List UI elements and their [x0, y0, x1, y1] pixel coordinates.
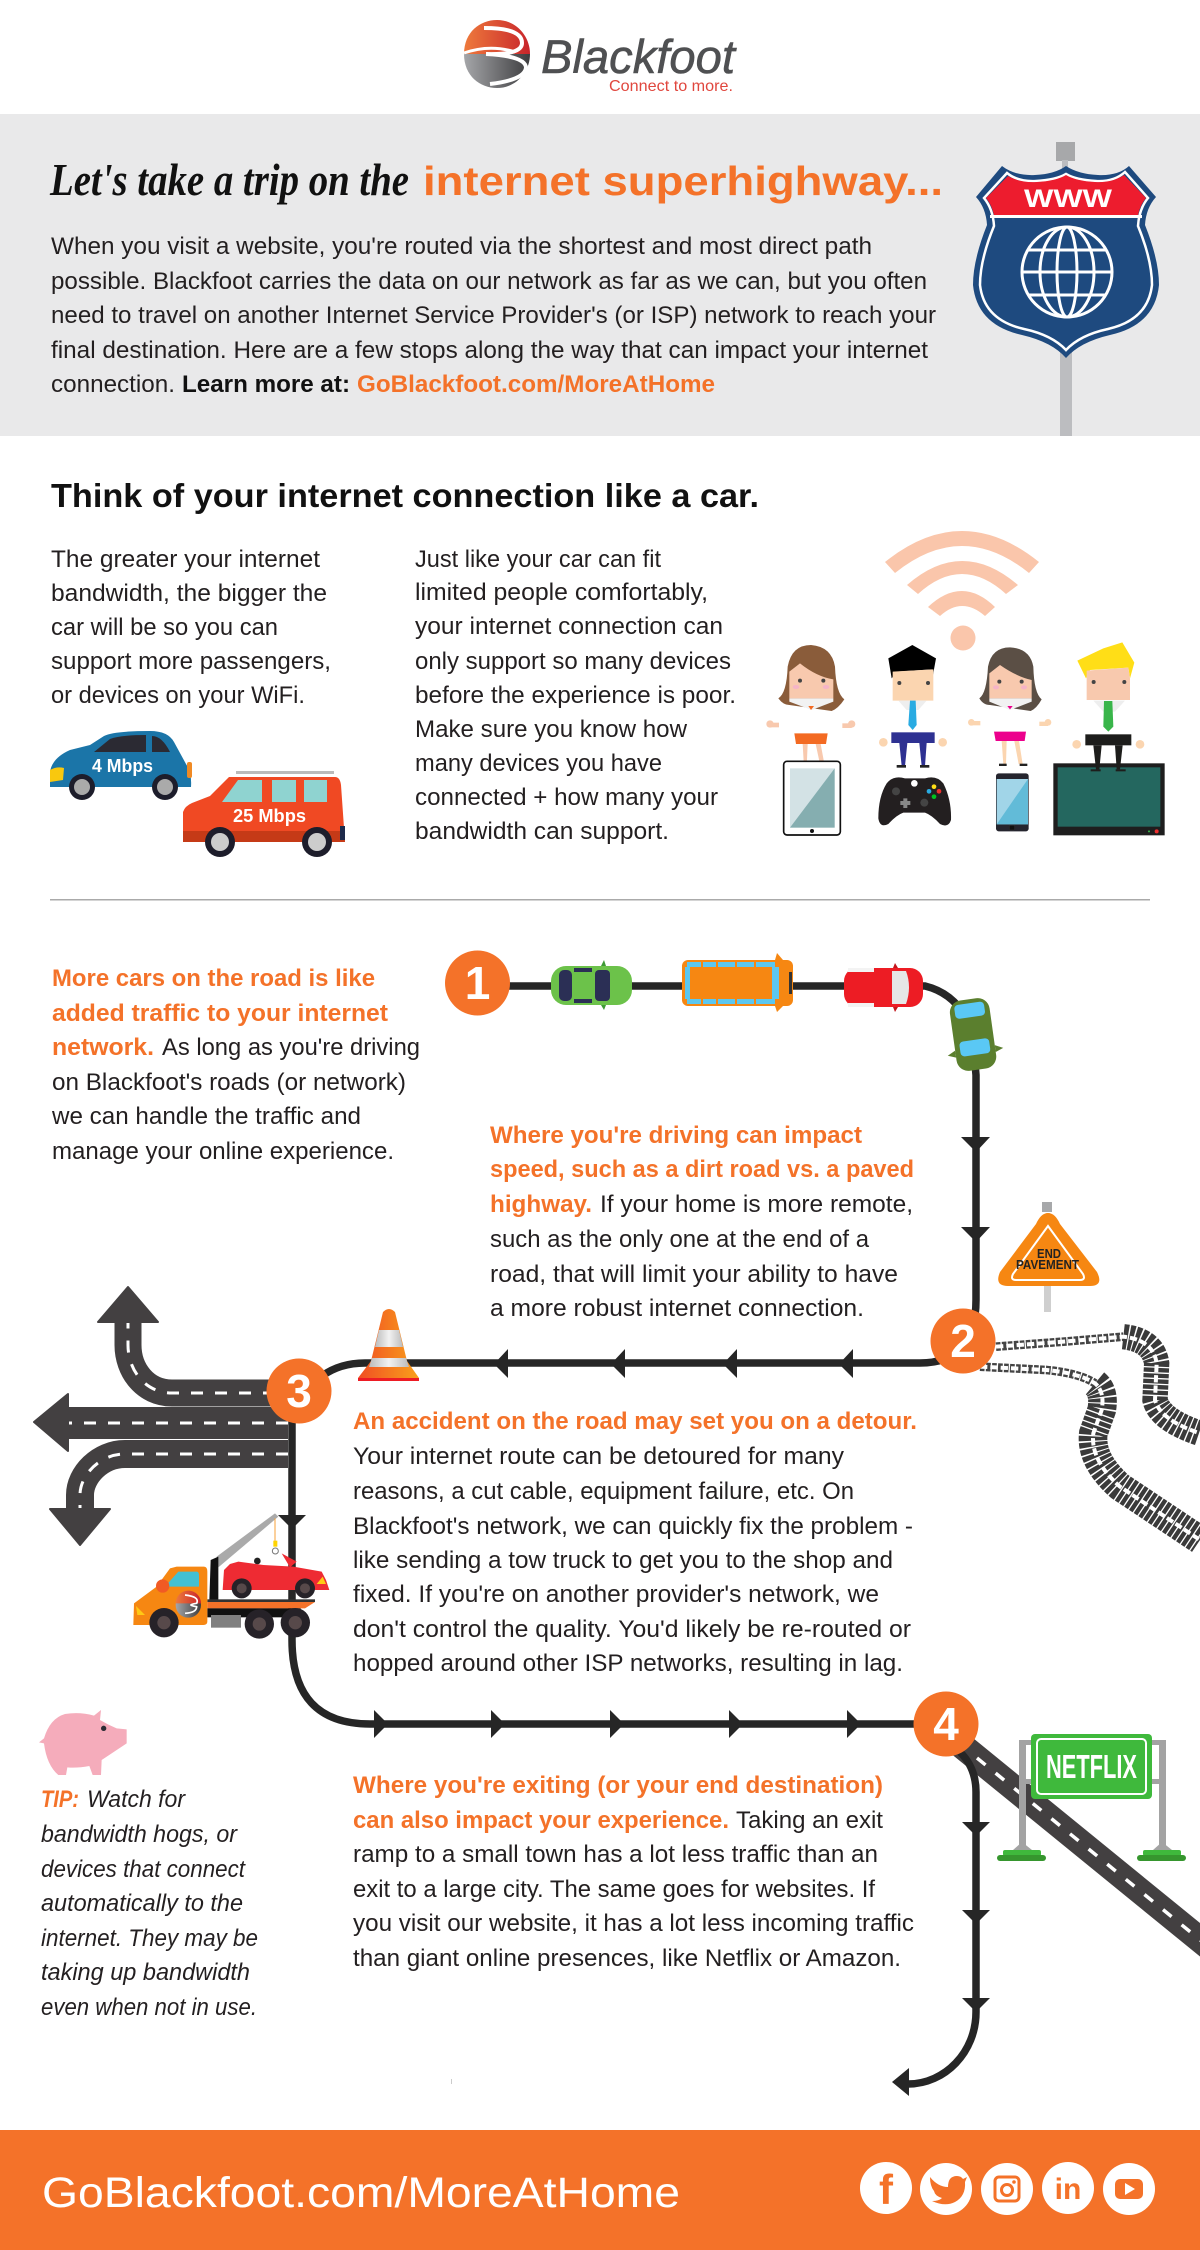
text block: devices: before the experience is poor.: [415, 682, 736, 709]
text block: bandwidth: car will be so you can: [51, 614, 278, 641]
text block: step 1 traffic: network.: [52, 1034, 154, 1061]
heading: car analogy: Think of your internet connection like a car.: [51, 477, 759, 514]
icon: facebook: [860, 2162, 912, 2214]
text block: devices: [415, 546, 736, 845]
arrows: route direction: [278, 1137, 990, 2096]
text block: step 2 speed: speed, such as a dirt road vs. a paved: [490, 1156, 914, 1183]
text block: tip: automatically to the: [41, 1890, 243, 1917]
text block: step 3 accident: An accident on the road may set you on a detour.: [353, 1408, 917, 1435]
icon: globe: [1022, 227, 1112, 317]
icon: twitter: [920, 2163, 972, 2215]
text block: intro: [51, 233, 936, 398]
text block: tip: devices that connect: [41, 1856, 246, 1883]
text block: step 2 speed: [490, 1122, 914, 1322]
icon: red van 25 Mbps: [183, 771, 345, 857]
text block: step 4 exiting: Taking an exit: [736, 1807, 883, 1834]
icon: instagram: [981, 2163, 1033, 2215]
text block: step 1 traffic: added traffic to your internet: [52, 1000, 388, 1027]
icon: piggy: [39, 1710, 127, 1775]
text block: step 3 accident: fixed. If you're on another provider's network, we: [353, 1581, 879, 1608]
person: woman with phone: [968, 647, 1051, 766]
text block: intro: When you visit a website, you're routed via the shortest and most direct path: [51, 233, 872, 260]
text block: step 1 traffic: we can handle the traffic and: [51, 1103, 361, 1130]
icon: television: [1053, 745, 1165, 835]
heading: intro title: internet superhighway...: [423, 158, 943, 204]
text block: bandwidth: [51, 546, 331, 709]
text block: step 4 exiting: you visit our website, it has a lot less incoming traffic: [353, 1910, 914, 1937]
icon: red van 25 Mbps: 25 Mbps: [233, 806, 306, 826]
text block: devices: Just like your car can fit: [415, 546, 661, 573]
text block: intro: final destination. Here are a few stops along the way that can impact your internet: [51, 337, 928, 364]
road: lower branch: [50, 1454, 288, 1545]
logo: Blackfoot: [464, 20, 737, 95]
text block: intro: possible. Blackfoot carries the data on our network as far as we can, but you often: [51, 268, 927, 295]
footer url: GoBlackfoot.com/MoreAtHome: [42, 2169, 680, 2217]
text block: step 4 exiting: can also impact your experience.: [353, 1807, 729, 1834]
icon: towed red car: [223, 1553, 329, 1598]
text block: step 3 accident: Blackfoot's network, we can quickly fix the problem -: [353, 1513, 913, 1540]
text block: step 2 speed: road, that will limit your ability to have: [490, 1261, 898, 1288]
icon: wifi signal: [885, 531, 1039, 650]
text block: step 1 traffic: on Blackfoot's roads (or network): [52, 1069, 406, 1096]
marker: step 3: 3: [286, 1365, 312, 1417]
text block: step 1 traffic: [51, 965, 420, 1165]
text block: devices: only support so many devices: [415, 648, 731, 675]
text block: step 3 accident: [353, 1408, 917, 1677]
text block: devices: connected + how many your: [415, 784, 718, 811]
text block: step 2 speed: a more robust internet connection.: [490, 1295, 864, 1322]
text block: intro: Learn more at:: [182, 371, 350, 398]
marker: step 4: [914, 1692, 978, 1756]
road: upper branch: [98, 1287, 275, 1393]
icon: end pavement sign: [998, 1202, 1099, 1312]
marker: step 4: 4: [933, 1698, 959, 1750]
icon: linkedin: [1042, 2162, 1094, 2214]
icon: red car: [844, 963, 923, 1012]
text block: devices: bandwidth can support.: [415, 818, 669, 845]
text block: step 3 accident: don't control the quality. You'd likely be re-routed or: [353, 1616, 911, 1643]
text block: devices: your internet connection can: [415, 613, 723, 640]
panel: intro band: [0, 114, 1200, 436]
icon: tire tracks: [980, 1337, 1200, 1540]
text block: tip: even when not in use.: [41, 1994, 257, 2021]
icon: olive car: [940, 995, 1006, 1074]
marker: step 2: 2: [950, 1315, 976, 1367]
text block: step 4 exiting: than giant online presences, like Netflix or Amazon.: [353, 1945, 901, 1972]
text block: step 1 traffic: As long as you're driving: [162, 1034, 420, 1061]
marker: step 2: [930, 1308, 996, 1374]
icon: traffic cone: [358, 1309, 419, 1381]
icon: orange bus: [682, 953, 793, 1012]
text block: step 2 speed: highway.: [490, 1191, 592, 1218]
text block: step 2 speed: such as the only one at the end of a: [490, 1226, 870, 1253]
icon: WWW highway shield sign: [973, 142, 1159, 436]
text block: step 1 traffic: More cars on the road is like: [52, 965, 375, 992]
text block: intro: connection.: [51, 371, 175, 398]
text block: step 4 exiting: [353, 1772, 914, 1972]
icon: game controller: [878, 777, 951, 825]
person: woman with tablet: [766, 645, 855, 770]
text block: tip: TIP:: [41, 1786, 79, 1813]
text block: tip: internet. They may be: [41, 1925, 258, 1952]
text block: tip: bandwidth hogs, or: [41, 1821, 238, 1848]
heading: intro title: Let's take a trip on the: [49, 154, 409, 205]
icon: Blackfoot sphere: [464, 20, 530, 88]
text block: intro: GoBlackfoot.com/MoreAtHome: [357, 371, 715, 398]
icon: WWW highway shield sign: WWW: [1024, 185, 1112, 213]
icon: tablet: [784, 761, 840, 835]
text block: tip: Watch for: [87, 1786, 186, 1813]
logo tagline: Connect to more.: [609, 78, 733, 95]
marker: step 1: [445, 950, 510, 1016]
text block: step 3 accident: like sending a tow truck to get you to the shop and: [353, 1547, 893, 1574]
icon: Netflix highway sign: NETFLIX: [1046, 1748, 1137, 1785]
text block: step 4 exiting: ramp to a small town has a lot less traffic than an: [353, 1841, 878, 1868]
text block: step 2 speed: If your home is more remote,: [600, 1191, 913, 1218]
marker: step 3: [266, 1358, 332, 1424]
person: man with game controller: [879, 645, 947, 768]
icon: branching roads: [34, 1287, 288, 1545]
text block: tip: [41, 1786, 258, 2021]
text block: step 3 accident: Your internet route can be detoured for many: [353, 1443, 844, 1470]
icon: smartphone: [996, 773, 1029, 831]
icon: end pavement sign: END: [1037, 1247, 1061, 1261]
marker: step 1: 1: [465, 957, 490, 1009]
text block: step 3 accident: hopped around other ISP networks, resulting in lag.: [353, 1650, 903, 1677]
heading: intro title: [49, 154, 943, 205]
icon: facebook: f: [879, 2166, 894, 2213]
road: middle branch: [34, 1394, 288, 1451]
logo wordmark: Blackfoot: [541, 30, 737, 83]
illustration: people with devices: [766, 642, 1165, 835]
icon: youtube: [1103, 2163, 1155, 2215]
text block: step 1 traffic: manage your online experience.: [52, 1138, 394, 1165]
text block: step 4 exiting: Where you're exiting (or your end destination): [353, 1772, 883, 1799]
text block: devices: many devices you have: [415, 750, 662, 777]
icon: tow truck: [133, 1513, 329, 1639]
text block: bandwidth: or devices on your WiFi.: [51, 682, 305, 709]
text block: bandwidth: support more passengers,: [51, 648, 331, 675]
icon: blue car 4 Mbps: 4 Mbps: [92, 756, 153, 776]
text block: step 4 exiting: exit to a large city. The same goes for websites. If: [353, 1876, 875, 1903]
footer: [0, 2130, 1200, 2250]
icon: linkedin: in: [1055, 2173, 1081, 2206]
text block: step 3 accident: reasons, a cut cable, equipment failure, etc. On: [353, 1478, 854, 1505]
person: blond man with tv: [1072, 642, 1144, 749]
text block: bandwidth: bandwidth, the bigger the: [51, 580, 327, 607]
icon: end pavement sign: PAVEMENT: [1016, 1258, 1079, 1272]
road: diagonal highway: [945, 1732, 1200, 1952]
icon: green car: [551, 960, 632, 1010]
text block: bandwidth: The greater your internet: [51, 546, 320, 573]
icon: Netflix highway sign: [997, 1734, 1186, 1861]
text block: step 2 speed: Where you're driving can impact: [490, 1122, 862, 1149]
text block: devices: Make sure you know how: [415, 716, 688, 743]
text block: devices: limited people comfortably,: [415, 579, 708, 606]
text block: intro: need to travel on another Internet Service Provider's (or ISP) network to reach your: [51, 302, 936, 329]
text block: tip: taking up bandwidth: [41, 1959, 250, 1986]
icon: blue car 4 Mbps: [50, 731, 192, 800]
route line: main path: [292, 986, 976, 2084]
